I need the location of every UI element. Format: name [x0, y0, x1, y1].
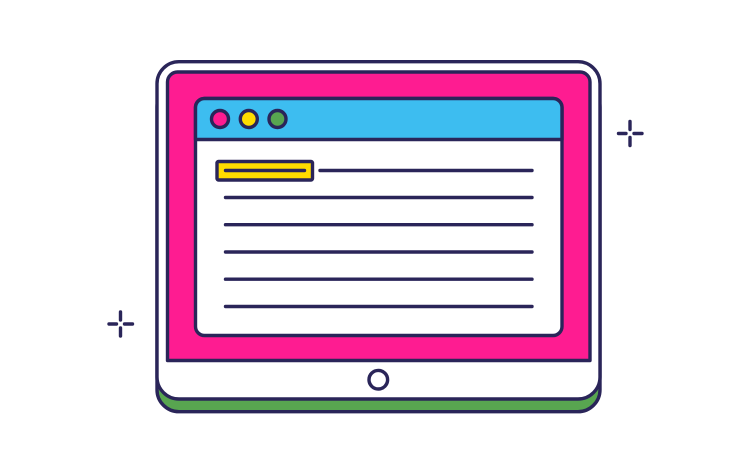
- tablet screen: pink: [168, 72, 590, 360]
- sparkle: left: [109, 312, 132, 336]
- tablet: [157, 62, 600, 412]
- tablet body: white frame: [157, 62, 600, 399]
- window control: yellow dot: [240, 110, 257, 128]
- window title bar: [196, 98, 562, 140]
- window control: pink dot: [212, 110, 228, 128]
- window body: [196, 98, 562, 336]
- text lines: [226, 170, 532, 306]
- highlighted text bar: [217, 162, 312, 180]
- sparkle: right: [618, 122, 642, 146]
- browser window: [196, 98, 562, 336]
- tablet base: green edge: [157, 85, 600, 412]
- home button: [369, 370, 388, 389]
- window control: green dot: [269, 110, 286, 128]
